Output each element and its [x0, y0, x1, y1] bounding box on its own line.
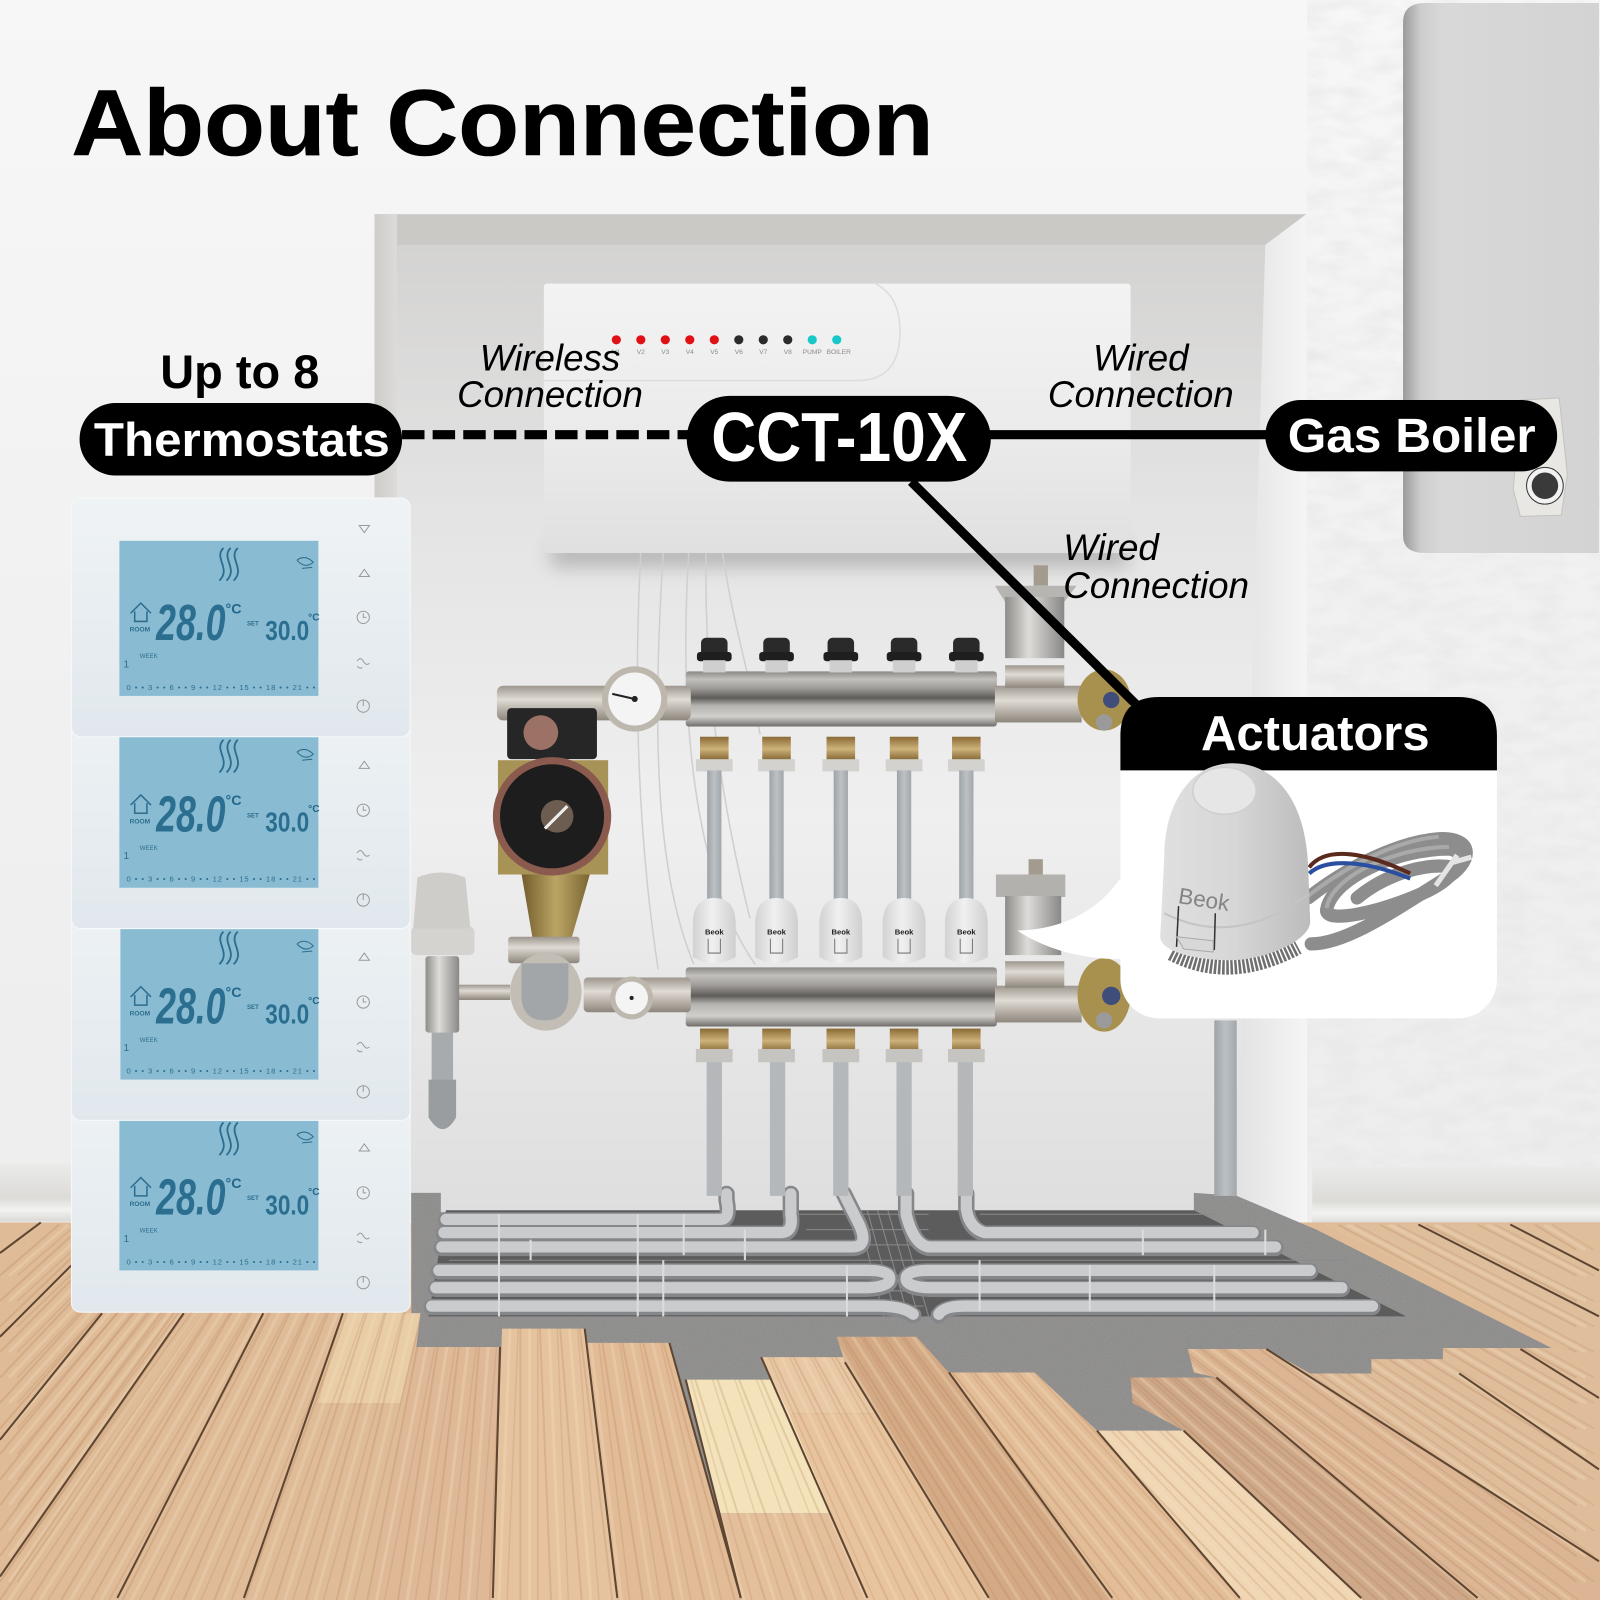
- LED labels: V7: [759, 349, 768, 356]
- LED labels: BOILER: [827, 349, 851, 356]
- latch slot: [1177, 906, 1215, 950]
- return pipe right: [1214, 1020, 1237, 1196]
- valve head: [413, 872, 470, 929]
- zone valve left: [411, 872, 510, 1129]
- thermostat 2 buttons: [357, 761, 369, 906]
- label: wired connection boiler: Wired: [1093, 337, 1190, 378]
- thermostat 2 screen: 30.0: [265, 807, 309, 838]
- background wall: [0, 0, 1600, 1235]
- cable: [1308, 839, 1466, 944]
- niche left reveal: [374, 214, 397, 1194]
- manifold column 2: [755, 638, 798, 1062]
- lighter plank: [318, 1313, 420, 1403]
- thermostat 2 screen: WEEK: [140, 845, 158, 852]
- thermostat 1 screen: 30.0: [265, 615, 309, 646]
- air vent lower: [996, 859, 1065, 955]
- thermostat 1 screen: 0 • • 3 • • 6 • • 9 • • 12 • • 15 • • 18 • • 21 • •: [127, 683, 316, 692]
- thermostat 1 screen: °C: [226, 601, 242, 617]
- wired link to actuators: [911, 482, 1138, 706]
- latch tab: [1177, 937, 1213, 952]
- top nickel pipe: [497, 686, 691, 720]
- thermostat 1 screen: SET: [247, 621, 259, 628]
- niche right reveal: [1237, 214, 1307, 1229]
- thermostat 2 screen: 0 • • 3 • • 6 • • 9 • • 12 • • 15 • • 18 • • 21 • •: [127, 875, 316, 884]
- thermostat 4 screen: 28.0: [155, 1168, 226, 1225]
- cable highlight: [1308, 837, 1449, 908]
- thermostat 1: [71, 498, 410, 737]
- thermostat 3 screen: 28.0: [155, 977, 226, 1034]
- LEDs: [612, 335, 841, 344]
- thermostat 4 screen: °C: [308, 1187, 320, 1198]
- thermostat 3 screen: 30.0: [265, 998, 309, 1029]
- lower pipe run: [584, 978, 691, 1012]
- manifold top: [686, 665, 1131, 731]
- thermostat 2 screen: SET: [247, 812, 259, 819]
- pump assembly: [493, 666, 691, 1031]
- thermostat 3 screen: 1: [123, 1043, 129, 1054]
- LED labels: [612, 349, 851, 356]
- drain pipe: [432, 1031, 453, 1082]
- right baseboard: [1312, 1166, 1600, 1224]
- body: [1160, 763, 1310, 960]
- pipe highlights: [432, 1194, 1372, 1314]
- LED labels: V8: [784, 349, 792, 356]
- wall niche: [374, 214, 1307, 1229]
- pump terminal box: [507, 708, 597, 759]
- label: wired connection actuators: Connection: [1063, 565, 1249, 606]
- label: wired connection actuators: Wired: [1063, 527, 1160, 568]
- thermostat 3: [71, 882, 410, 1120]
- LED labels: V4: [686, 349, 694, 356]
- thermostat 3 screen: °C: [226, 985, 242, 1001]
- LED labels: V1: [612, 349, 621, 356]
- thermostat 4 screen: WEEK: [140, 1228, 158, 1235]
- controller box CCT-10X: [544, 284, 1131, 553]
- lower elbow: [510, 953, 582, 1031]
- manifold column 1: Beok: [705, 928, 724, 937]
- wires: [1309, 854, 1410, 879]
- thermostat 2 screen: [119, 733, 320, 888]
- right tee fitting: [995, 665, 1082, 722]
- pill: gas boiler: Gas Boiler: [1288, 410, 1536, 463]
- thermostat 4 screen: [119, 1115, 320, 1270]
- thermostat 4 screen: SET: [247, 1195, 259, 1202]
- valve collar: [411, 927, 474, 955]
- valve body: [426, 956, 459, 1033]
- label: wired connection boiler: [1048, 337, 1234, 415]
- pump neck: [520, 867, 592, 939]
- thermostat 1 screen: WEEK: [140, 653, 158, 660]
- top lid outline: [544, 284, 900, 381]
- LED labels: PUMP: [803, 349, 822, 356]
- teeth: [1171, 947, 1298, 967]
- zip tie: [1436, 855, 1471, 886]
- manifold column 1: [693, 638, 736, 1062]
- callout body: [1120, 697, 1497, 1018]
- label: up to 8: Up to 8: [160, 346, 319, 398]
- pill: thermostats: Thermostats: [94, 414, 390, 466]
- manifold column 4: [883, 638, 926, 1062]
- thermostat 4 screen: °C: [226, 1176, 242, 1192]
- heating pipes: [432, 1194, 1372, 1315]
- LED labels: V5: [710, 349, 719, 356]
- LED labels: V2: [637, 349, 645, 356]
- thermostat 1 screen: 1: [123, 659, 129, 670]
- niche top reveal: [374, 214, 1306, 245]
- underfloor pipe bed: [429, 1194, 1406, 1316]
- callout tail: [1017, 876, 1122, 959]
- thermostat 2 screen: 28.0: [155, 786, 226, 843]
- thermostat 1 screen: [119, 541, 320, 696]
- thermostat 1 buttons: [357, 526, 369, 712]
- lower union nut: [508, 937, 580, 963]
- drain cap: [429, 1080, 456, 1129]
- tube drops to floor: [714, 1061, 965, 1196]
- planks centre: [369, 1329, 990, 1600]
- lower gauge: [610, 977, 653, 1019]
- title: About Connection: [71, 70, 934, 175]
- pipe clips: [499, 1214, 1265, 1316]
- brass bracket: [1078, 669, 1131, 731]
- LED labels: V3: [661, 349, 670, 356]
- brass bracket: [1078, 958, 1131, 1032]
- wood floor planks: [0, 1222, 1600, 1600]
- wired link to boiler: [990, 430, 1267, 439]
- label: wireless connection: Connection: [457, 374, 643, 415]
- label: wireless connection: [457, 337, 643, 415]
- thermostat 3 screen: [120, 924, 320, 1080]
- concrete floor bed: [411, 1193, 1600, 1600]
- thermostat 4 screen: 30.0: [265, 1189, 309, 1220]
- upper gauge: [602, 666, 667, 732]
- thermostat 3 buttons: [357, 953, 369, 1098]
- pump head: [493, 757, 611, 876]
- boiler: [1403, 3, 1599, 553]
- control wires: [637, 552, 760, 969]
- boiler control knob: [1513, 398, 1567, 516]
- wood floor base: [0, 1222, 1600, 1600]
- callout: actuators: [1017, 697, 1497, 1018]
- thermostat 3 screen: WEEK: [140, 1037, 158, 1044]
- pill: gas boiler: [1265, 400, 1557, 471]
- manifold column 3: Beok: [831, 928, 851, 937]
- label: wireless connection: Wireless: [480, 337, 620, 378]
- thermostat 1 screen: ROOM: [130, 627, 151, 634]
- left baseboard: [0, 1163, 82, 1221]
- thermostat 2 screen: °C: [226, 793, 242, 809]
- thermostat 2 screen: ROOM: [130, 818, 151, 825]
- actuator product: [1160, 763, 1471, 967]
- thermostat 3 screen: ROOM: [130, 1010, 151, 1017]
- manifold column 3: [819, 638, 862, 1062]
- thermostat 4: [71, 1073, 410, 1312]
- wood grain: [0, 1224, 1594, 1600]
- manifold column 4: Beok: [895, 928, 914, 937]
- button: [1193, 767, 1256, 814]
- dashed wireless link: [402, 430, 690, 439]
- thermostat 1 screen: °C: [308, 612, 320, 623]
- collar line: [1164, 894, 1309, 927]
- pill: CCT-10X: CCT-10X: [711, 398, 967, 476]
- label: wired connection boiler: Connection: [1048, 374, 1234, 415]
- planks right: [837, 1224, 1600, 1600]
- thermostat 3 screen: 0 • • 3 • • 6 • • 9 • • 12 • • 15 • • 18 • • 21 • •: [127, 1066, 316, 1075]
- mesh: [449, 1210, 1347, 1316]
- LED labels: V6: [735, 349, 743, 356]
- thermostat 4 buttons: [357, 1144, 369, 1289]
- callout header: [1120, 697, 1497, 770]
- callout heading: Actuators: [1201, 707, 1430, 761]
- manifold column 5: [945, 638, 988, 1062]
- floor left: [0, 1222, 420, 1600]
- thermostat 3 screen: °C: [308, 996, 320, 1007]
- thermostat 3 screen: SET: [247, 1004, 259, 1011]
- brand: Beok: [1177, 883, 1232, 916]
- floor seams: [0, 1222, 1599, 1598]
- wall plaster texture: [1307, 0, 1600, 1168]
- thermostat 4 screen: 0 • • 3 • • 6 • • 9 • • 12 • • 15 • • 18 • • 21 • •: [127, 1257, 316, 1266]
- air vent upper: [995, 565, 1077, 658]
- thermostat 1 screen: 28.0: [155, 594, 226, 651]
- thermostat 2 screen: °C: [308, 804, 320, 815]
- valve arm pipe: [457, 985, 510, 1000]
- thermostat 4 screen: 1: [123, 1234, 129, 1245]
- thermostat 2: [71, 690, 410, 929]
- label: wired connection actuators: [1063, 527, 1249, 606]
- thermostat 2 screen: 1: [123, 851, 129, 862]
- pump plate: [498, 760, 608, 874]
- manifold column 2: Beok: [767, 928, 787, 937]
- controller shadow: [551, 541, 1128, 567]
- manifold column 5: Beok: [957, 928, 976, 937]
- manifold bottom: [686, 958, 1131, 1032]
- right tee fitting: [995, 961, 1082, 1022]
- thermostat 4 screen: ROOM: [130, 1201, 151, 1208]
- pill: thermostats: [80, 403, 402, 476]
